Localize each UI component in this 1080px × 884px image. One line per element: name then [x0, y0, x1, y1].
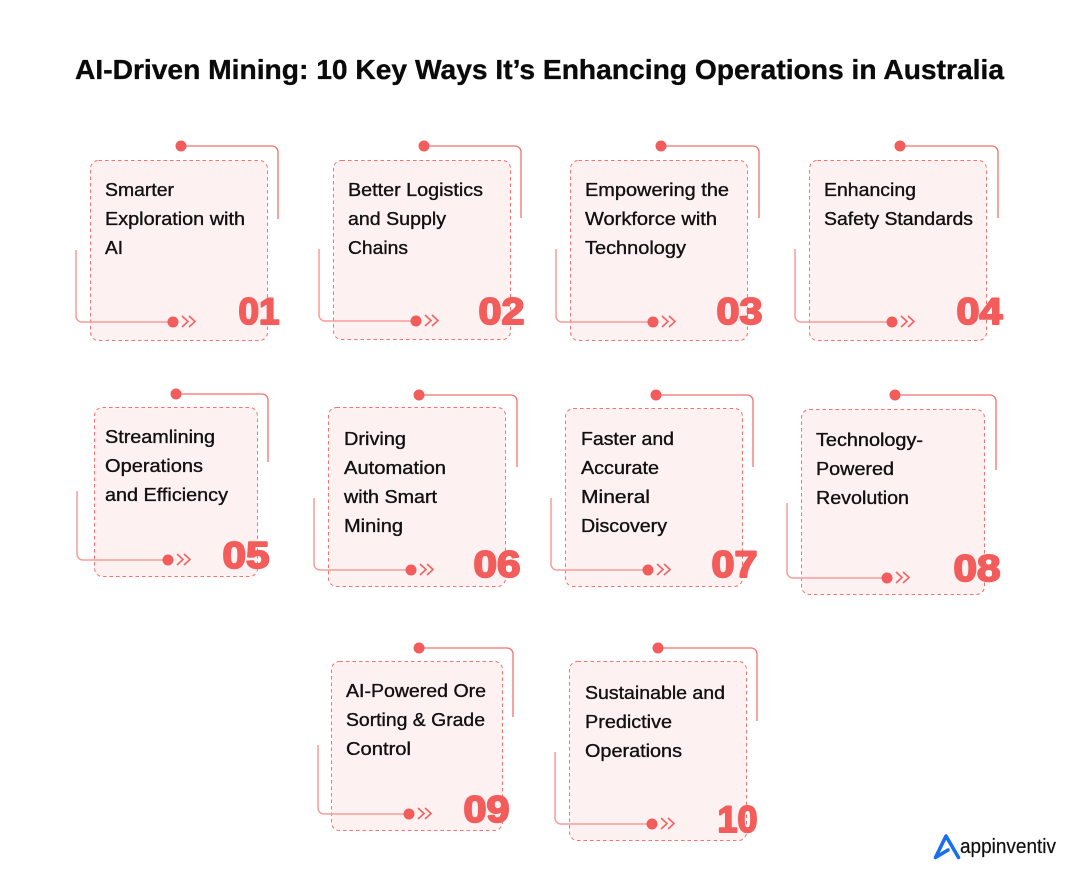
card 07: Faster and [581, 429, 674, 449]
card 06: Driving [344, 429, 406, 449]
card 03: Workforce with [585, 209, 717, 229]
card 07: Mineral [581, 487, 650, 507]
card 09: 09 [464, 789, 510, 830]
card 08: 08 [954, 548, 1000, 589]
card 02: and Supply [348, 209, 446, 229]
title: AI-Driven Mining: 10 Key Ways It’s Enhancing Operations in Australia [75, 54, 1004, 85]
card 03 [556, 140, 762, 340]
wordmark: appinventiv [960, 836, 1056, 858]
card 02 [319, 140, 524, 340]
card 05: Operations [105, 456, 203, 476]
card 05: and Efficiency [105, 485, 228, 505]
card 05: 05 [222, 535, 270, 576]
card 10: Operations [585, 741, 682, 761]
card 03: Technology [585, 238, 686, 258]
card 04: Enhancing [824, 180, 916, 200]
card 07 [551, 390, 758, 586]
card 08 [787, 390, 1000, 594]
card 09: Control [346, 739, 411, 759]
card 04 [795, 140, 1003, 340]
card 07: 07 [712, 544, 758, 585]
card 05 [77, 388, 270, 576]
card 07: Discovery [581, 516, 667, 536]
card 06 [314, 390, 520, 586]
card 03: Empowering the [585, 180, 729, 200]
card 07: Accurate [581, 458, 659, 478]
card 09: AI-Powered Ore [346, 681, 486, 701]
card 10: Predictive [585, 712, 672, 732]
card 06: 06 [474, 544, 520, 585]
card 03: 03 [716, 291, 762, 332]
card 01: Exploration with [105, 209, 245, 229]
card 08: Technology- [816, 430, 923, 450]
card 06: Automation [344, 458, 446, 478]
card 09 [318, 642, 513, 830]
logo: appinventiv [936, 836, 1056, 858]
card 06: Mining [344, 516, 403, 536]
card 10 [555, 642, 758, 840]
card 02: 02 [478, 291, 524, 332]
card 02: Better Logistics [348, 180, 483, 200]
card 01 [76, 140, 280, 340]
card 09: Sorting & Grade [346, 710, 485, 730]
card 10: Sustainable and [585, 683, 725, 703]
card 01: 01 [238, 291, 280, 332]
card 02: Chains [348, 238, 408, 258]
card 08: Revolution [816, 488, 909, 508]
card 10: 10 [718, 799, 758, 840]
card 01: AI [105, 238, 123, 258]
card 05: Streamlining [105, 427, 215, 447]
icon: appinventiv triangle [936, 836, 958, 858]
card 08: Powered [816, 459, 894, 479]
card 01: Smarter [105, 180, 174, 200]
card 04: Safety Standards [824, 209, 973, 229]
card 04: 04 [956, 291, 1003, 332]
card 06: with Smart [343, 487, 437, 507]
